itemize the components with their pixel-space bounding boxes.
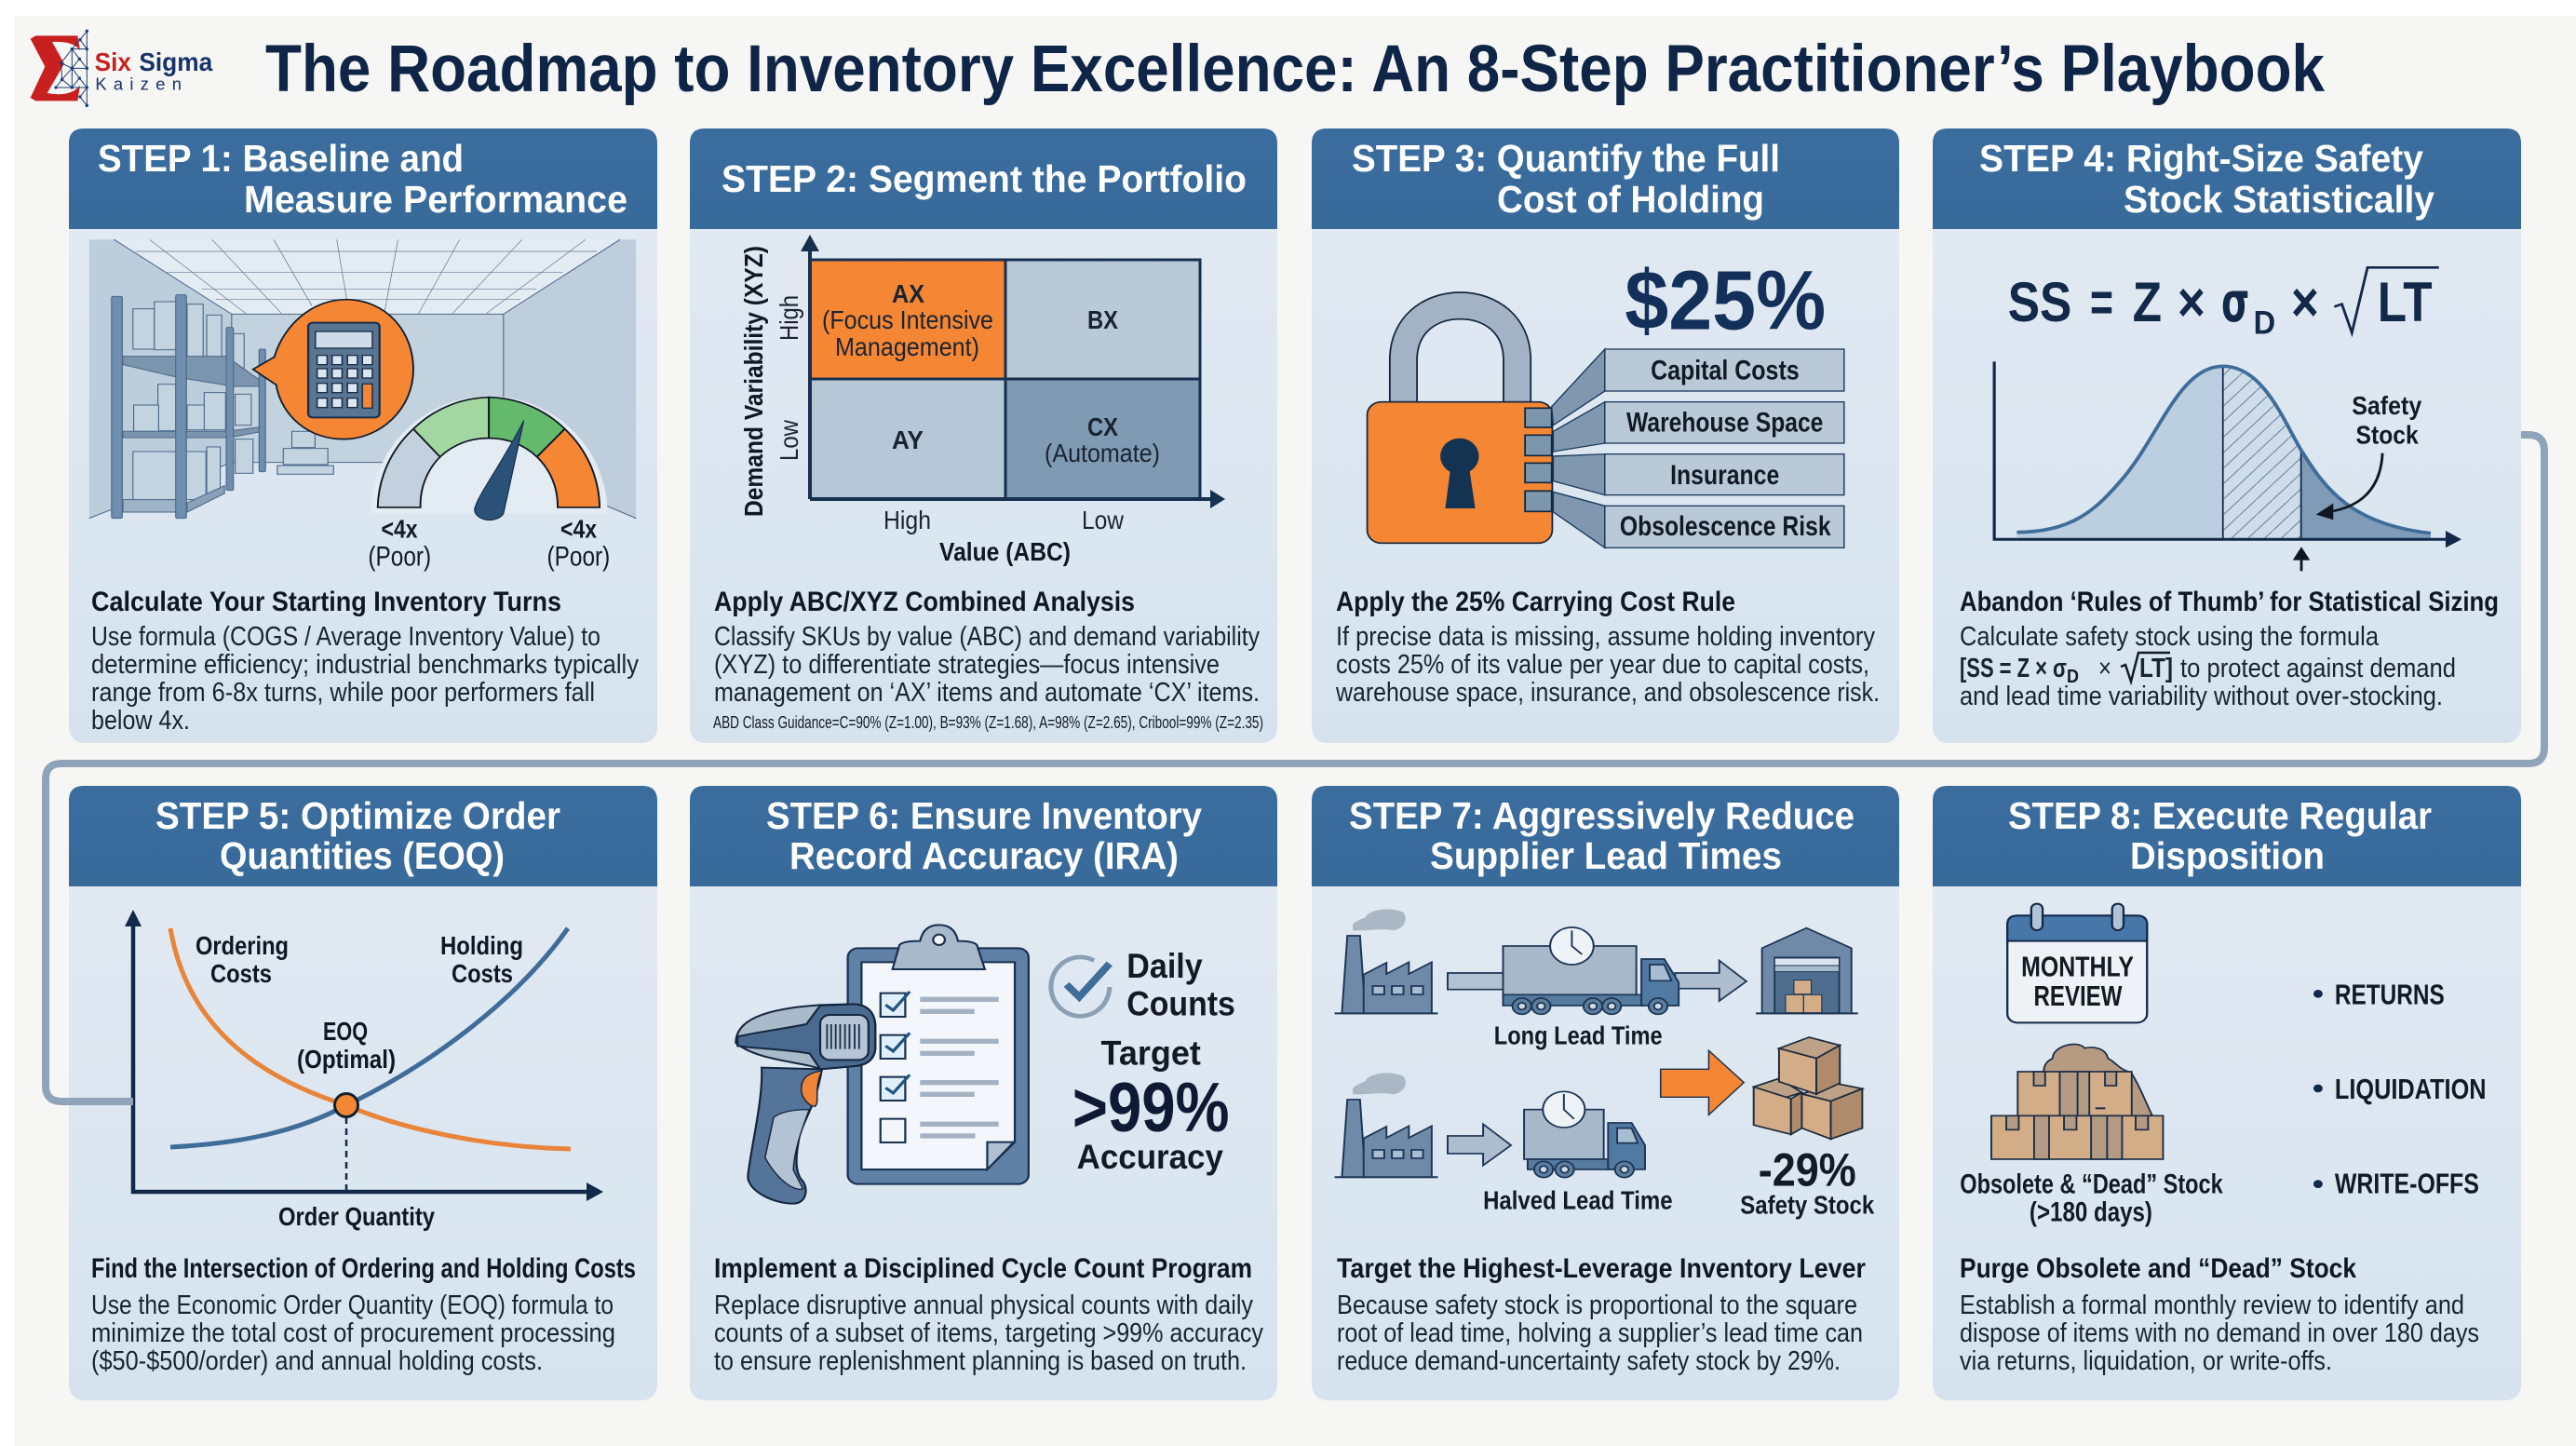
formula [2008,267,2439,341]
warehouse room [89,239,636,519]
icon: factory short [1335,1073,1437,1177]
header: step 6 [690,786,1277,886]
header: step 8: STEP 8: Execute Regular [2008,794,2432,837]
clipboard [848,925,1029,1184]
text block: step 2: Apply ABC/XYZ Combined Analysis [714,587,1135,617]
header: step 6: STEP 6: Ensure Inventory [766,794,1202,837]
text block: step 4: to protect against demand [2180,654,2456,683]
chart: EOQ curves: Costs [210,959,272,988]
truck short [1448,1091,1645,1178]
chart: EOQ curves: Order Quantity [278,1202,435,1231]
gauge [371,396,608,520]
text block: step 8: Purge Obsolete and “Dead” Stock [1960,1253,2356,1284]
panel: step 7 [1312,786,1899,1400]
text block: step 6: Implement a Disciplined Cycle Count Program [714,1253,1252,1284]
logo: Six Sigma Kaizen: Six [95,47,131,76]
chart: EOQ curves: EOQ [323,1017,368,1046]
chart: EOQ curves: Costs [452,959,513,988]
text block: step 7: Because safety stock is proportional to the square [1337,1291,1857,1320]
illustration: formula and bell curve [1994,267,2461,571]
text block: step 7: reduce demand-uncertainty safety stock by 29%. [1337,1346,1841,1376]
text block: step 1: determine efficiency; industrial benchmarks typically [91,650,640,680]
gauge labels: (Poor) [368,540,431,572]
illustration: monthly review and dead stock: (>180 days) [2030,1196,2152,1227]
chart: ABC/XYZ matrix: BX [1087,305,1118,334]
cost tags [1552,349,1844,547]
arrow: orange [1661,1050,1744,1115]
callout: accuracy target: Accuracy [1077,1139,1223,1176]
statistic: minus 29 percent: -29% [1759,1143,1856,1196]
scanner [735,1004,875,1204]
chart: ABC/XYZ matrix: Low [775,419,803,461]
gauge labels [368,515,610,572]
gauge labels: <4x [560,515,597,544]
formula: D [2254,304,2275,341]
list: disposition routes: RETURNS [2335,978,2445,1010]
chart: EOQ curves [125,910,603,1231]
formula: LT [2378,272,2433,334]
icon: factory long [1335,909,1437,1013]
header: step 6: Record Accuracy (IRA) [789,834,1179,877]
text block: step 8 [1960,1253,2479,1376]
panel: step 8 [1933,786,2521,1400]
header: step 3 [1312,128,1899,229]
header: step 7: STEP 7: Aggressively Reduce [1349,794,1854,837]
logo: Six Sigma Kaizen: Sigma [139,47,213,76]
text block: step 5: ($50-$500/order) and annual holding costs. [91,1346,543,1376]
header: step 3: Cost of Holding [1497,178,1764,221]
illustration: padlock with cost tags: Insurance [1670,460,1779,491]
icon: dead stock pile [1991,1045,2163,1159]
illustration: monthly review and dead stock: MONTHLY [2021,950,2134,982]
text block: step 1: below 4x. [91,706,190,736]
illustration: lead time comparison [1335,909,1874,1220]
header: step 8: Disposition [2130,834,2325,877]
header: step 5: Quantities (EOQ) [220,834,505,877]
chart: EOQ curves: (Optimal) [297,1045,396,1074]
formula: × [2178,272,2205,334]
icon: calendar [2007,904,2147,1022]
chart: ABC/XYZ matrix: (Focus Intensive [822,305,993,334]
text block: step 7: root of lead time, holving a supplier’s lead time can [1337,1318,1863,1348]
text block: step 3 [1335,587,1880,708]
text block: step 3: Apply the 25% Carrying Cost Rule [1336,587,1735,617]
text block: step 4: Calculate safety stock using the formula [1960,622,2379,652]
header: step 5 [69,786,657,886]
illustration: padlock with cost tags: Obsolescence Risk [1620,511,1831,542]
header: step 7 [1312,786,1899,886]
text block: step 8: via returns, liquidation, or write-offs. [1960,1346,2332,1376]
icon: boxes [1754,1037,1862,1139]
chart: ABC/XYZ matrix: Demand Variability (XYZ) [739,246,768,517]
text block: step 2: management on ‘AX’ items and automate ‘CX’ items. [714,678,1260,708]
text block: step 6: Replace disruptive annual physical counts with daily [714,1291,1254,1320]
shelving with boxes [112,295,265,519]
chart: ABC/XYZ matrix: High [883,506,931,534]
chart: EOQ curves: Ordering [196,931,289,960]
illustration: padlock with cost tags: Warehouse Space [1626,407,1823,438]
text block: step 5 [91,1253,636,1376]
illustration: scanner and clipboard [735,925,1235,1204]
statistic: minus 29 percent [1740,1143,1874,1220]
text block: step 8: Establish a formal monthly review to identify and [1960,1291,2464,1320]
logo: Six Sigma Kaizen: Kaizen [95,74,182,94]
header: step 1: Measure Performance [244,178,627,221]
chart: ABC/XYZ matrix: AY [892,426,924,454]
padlock [1368,292,1552,543]
statistic: $25%: $25% [1625,253,1826,347]
text block: step 8: dispose of items with no demand in over 180 days [1960,1318,2479,1348]
title: The Roadmap to Inventory Excellence: An 8-Step Practitioner’s Playbook [265,33,2325,106]
header: step 2: STEP 2: Segment the Portfolio [722,157,1247,200]
panel: step 3 [1312,128,1899,743]
arrow: reorder point [2293,547,2310,571]
illustration: lead time comparison: Halved Lead Time [1483,1185,1673,1215]
header: step 4 [1933,128,2521,229]
callout: safety stock: Safety [2352,392,2421,421]
callout: accuracy target: Counts [1126,985,1235,1023]
text block: step 1 [91,587,640,736]
header: step 5: STEP 5: Optimize Order [155,794,560,837]
icon: warehouse [1756,928,1858,1013]
list: disposition routes [2313,978,2487,1199]
truck long [1448,927,1747,1014]
text block: step 2: Classify SKUs by value (ABC) and demand variability [714,622,1261,652]
text block: step 6 [714,1253,1264,1376]
illustration: padlock with cost tags: Capital Costs [1651,355,1800,385]
text block: step 5: Find the Intersection of Ordering and Holding Costs [91,1253,636,1284]
chart: ABC/XYZ matrix: (Automate) [1045,439,1160,467]
icon: check circle [1051,957,1110,1016]
text block: step 1: Calculate Your Starting Inventory Turns [91,587,561,617]
text block: step 2: (XYZ) to differentiate strategies—focus intensive [714,650,1220,680]
header: step 4: STEP 4: Right-Size Safety [1979,137,2423,180]
text block: step 4: LT] [2139,654,2173,683]
header: step 2 [690,128,1277,229]
statistic: minus 29 percent: Safety Stock [1740,1190,1874,1220]
header: step 7: Supplier Lead Times [1430,834,1782,877]
illustration: monthly review and dead stock: REVIEW [2034,980,2123,1011]
chart: ABC/XYZ matrix: Low [1082,506,1125,534]
callout: safety stock: Stock [2356,422,2419,450]
panel: step 1 [69,128,657,743]
icon: calculator bubble [253,300,413,439]
panel: step 4 [1933,128,2521,743]
formula: σ [2221,269,2249,334]
chart: ABC/XYZ matrix: Value (ABC) [939,537,1071,566]
text block: step 4: and lead time variability without over-stocking. [1960,682,2443,711]
formula: × [2291,272,2319,334]
panel: step 5 [69,786,657,1400]
text block: step 6: counts of a subset of items, targeting >99% accuracy [714,1318,1264,1348]
text block: step 3: costs 25% of its value per year due to capital costs, [1336,650,1869,680]
header: step 3: STEP 3: Quantify the Full [1352,137,1780,180]
illustration: padlock with cost tags [1368,253,1844,547]
illustration: monthly review and dead stock: Obsolete & “Dead” Stock [1960,1169,2223,1199]
list: disposition routes: WRITE-OFFS [2335,1168,2479,1199]
text block: step 1: range from 6-8x turns, while poor performers fall [91,678,595,708]
text block: step 2: ABD Class Guidance=C=90% (Z=1.00), B=93% (Z=1.68), A=98% (Z=2.65), Cribool=99% (Z=2.35) [713,713,1263,732]
text block: step 4: D [2067,667,2079,687]
pallet [277,431,333,474]
header: step 4: Stock Statistically [2124,178,2434,221]
callout: accuracy target: >99% [1072,1068,1230,1146]
text block: step 6: to ensure replenishment planning is based on truth. [714,1346,1247,1376]
text block: step 7: Target the Highest-Leverage Inventory Lever [1337,1253,1866,1284]
text block: step 5: minimize the total cost of procurement processing [91,1318,615,1348]
text block: step 2 [713,587,1263,732]
gauge labels: <4x [382,515,418,544]
callout: safety stock [2316,392,2421,520]
list: disposition routes: LIQUIDATION [2335,1073,2487,1104]
text block: step 4: × [2098,654,2111,683]
chart: ABC/XYZ matrix: CX [1087,412,1118,441]
logo: Six Sigma Kaizen [31,30,213,107]
panel: step 2 [690,128,1277,743]
header: step 1: STEP 1: Baseline and [98,137,464,180]
formula: Z [2133,272,2162,334]
illustration: warehouse with calculator and gauge [89,239,636,572]
chart: ABC/XYZ matrix: AX [892,279,924,308]
chart: ABC/XYZ matrix: High [775,295,803,341]
callout: accuracy target: Daily [1126,948,1203,986]
chart: EOQ curves: Holding [440,931,523,960]
panel: step 6 [690,786,1277,1400]
text block: step 4: [SS = Z × σ [1960,654,2067,683]
text block: step 4: Abandon ‘Rules of Thumb’ for Statistical Sizing [1960,587,2499,617]
header: step 1 [69,128,657,229]
callout: accuracy target: Target [1101,1034,1201,1073]
header: step 8 [1933,786,2521,886]
text block: step 7 [1337,1253,1866,1376]
gauge labels: (Poor) [547,540,610,572]
text block: step 4 [1960,587,2499,711]
text block: step 3: If precise data is missing, assume holding inventory [1336,622,1876,652]
chart: ABC/XYZ matrix: Management) [835,332,979,361]
formula: = [2090,272,2113,334]
text block: step 5: Use the Economic Order Quantity (EOQ) formula to [91,1291,614,1320]
formula: SS [2008,272,2071,334]
chart: ABC/XYZ matrix [739,235,1225,566]
illustration: lead time comparison: Long Lead Time [1494,1021,1663,1050]
bell curve [1994,361,2461,547]
callout: accuracy target [1072,948,1235,1176]
illustration: monthly review and dead stock [1960,904,2487,1227]
arrow: connector from step 4 to step 5 [46,435,2544,1101]
text block: step 3: warehouse space, insurance, and obsolescence risk. [1335,678,1880,708]
text block: step 1: Use formula (COGS / Average Inventory Value) to [91,622,600,652]
